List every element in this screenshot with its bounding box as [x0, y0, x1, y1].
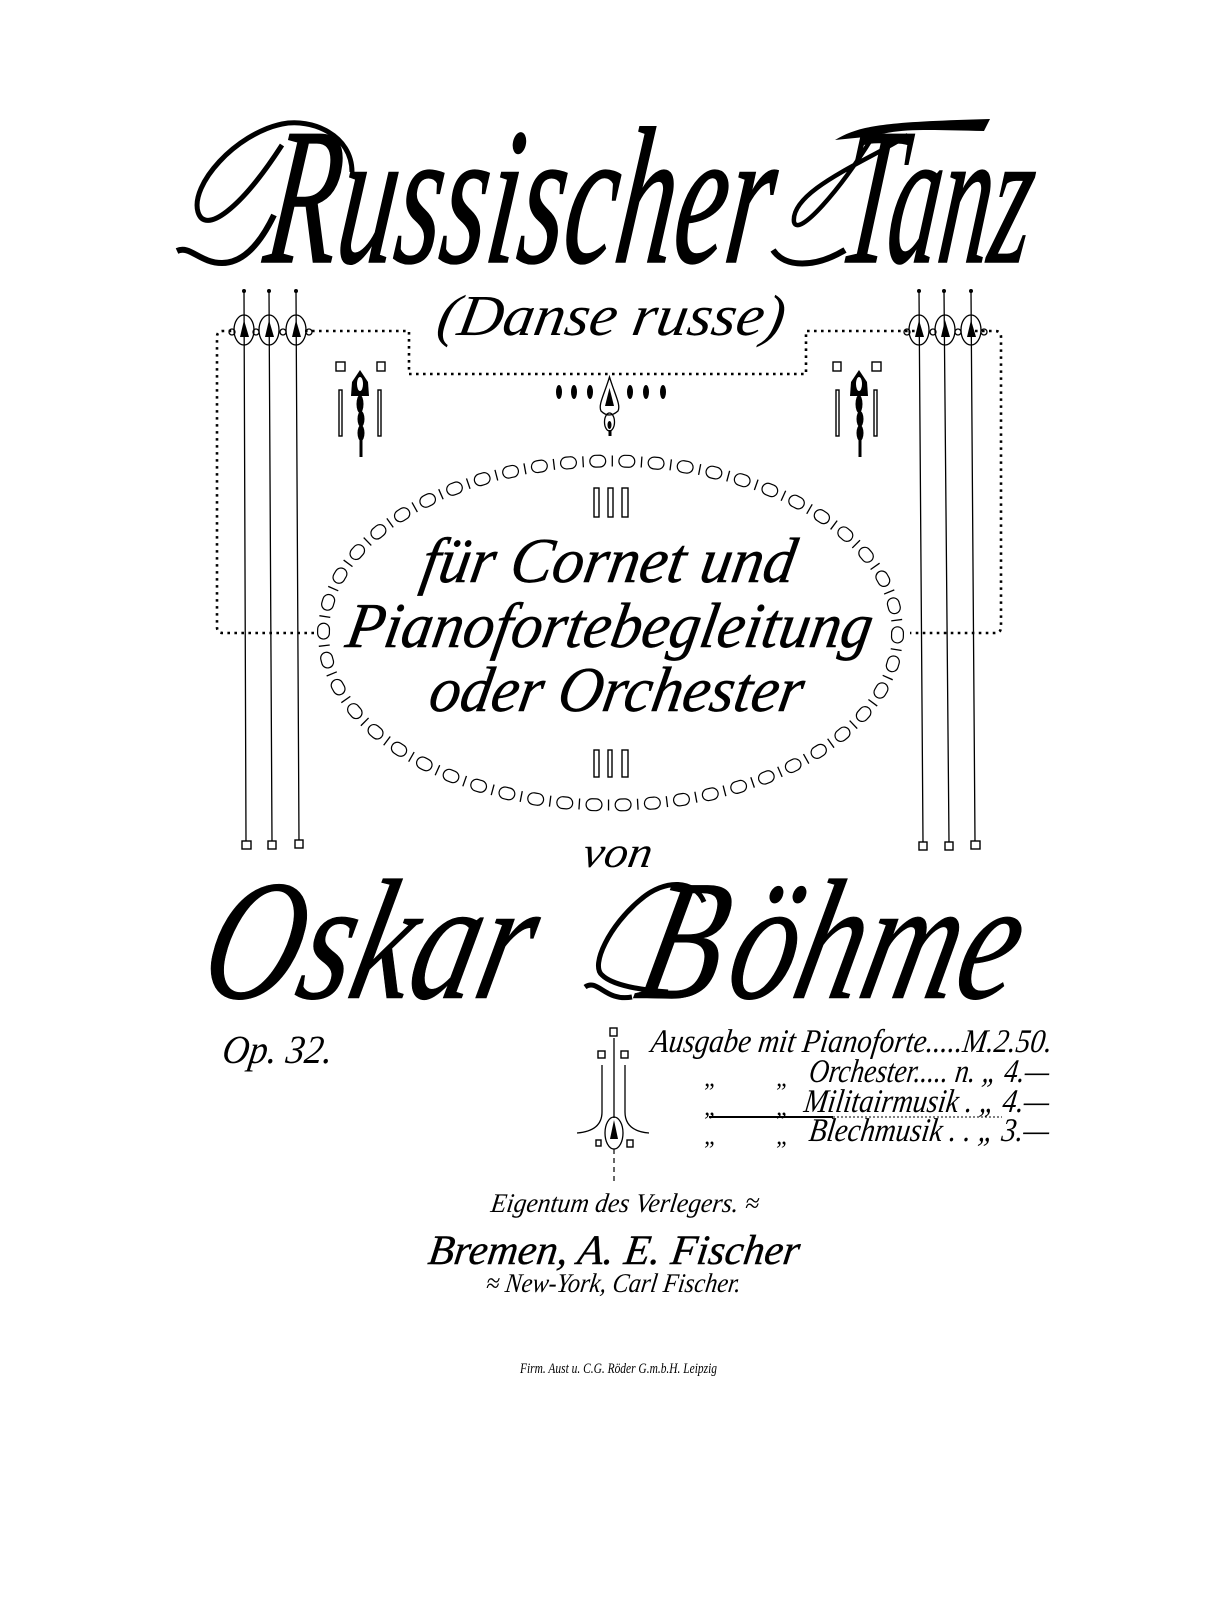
- price list: „: [704, 1066, 717, 1092]
- price list: Orchester..... n. „ 4.—: [807, 1053, 1052, 1090]
- small bell ornament: [577, 1028, 649, 1182]
- price list: Blechmusik . . „ 3.—: [807, 1112, 1053, 1149]
- left spear ornament: [336, 362, 385, 457]
- bottom bars: [594, 750, 628, 777]
- price list: [647, 1023, 1055, 1150]
- composer name: [187, 845, 1044, 1036]
- engraver imprint: Firm. Aust u. C.G. Röder G.m.b.H. Leipzig: [519, 1361, 717, 1377]
- subtitle: (Danse russe): [433, 283, 791, 348]
- price list: „: [704, 1095, 717, 1121]
- instrumentation text: [341, 525, 879, 725]
- right vertical lines with ovals: [904, 289, 987, 850]
- composer name: Oskar: [187, 845, 558, 1036]
- composer name: Böhme: [623, 845, 1044, 1035]
- instrumentation text: oder Orchester: [425, 654, 811, 725]
- left vertical lines with ovals: [229, 289, 312, 849]
- top bars: [594, 488, 628, 517]
- price list: Militairmusik . „ 4.—: [801, 1083, 1052, 1120]
- price list: „: [776, 1095, 789, 1121]
- center ornament: [556, 377, 666, 436]
- publisher note: Eigentum des Verlegers. ≈: [488, 1188, 761, 1218]
- price list: „: [776, 1124, 789, 1150]
- title: Tanz: [831, 90, 1047, 305]
- price list: Ausgabe mit Pianoforte.....M.2.50.: [647, 1023, 1055, 1060]
- title: Russischer: [256, 90, 789, 305]
- von: von: [579, 827, 657, 877]
- dotted frame: [217, 331, 1001, 633]
- publisher name: Bremen, A. E. Fischer: [426, 1227, 804, 1274]
- price list: „: [704, 1124, 717, 1150]
- price list: „: [776, 1066, 789, 1092]
- right spear ornament: [833, 362, 881, 457]
- new york publisher: ≈ New-York, Carl Fischer.: [484, 1268, 743, 1298]
- instrumentation text: Pianofortebegleitung: [341, 590, 879, 661]
- instrumentation text: für Cornet und: [417, 525, 803, 596]
- opus number: Op. 32.: [220, 1027, 336, 1072]
- bead ring: [324, 461, 898, 805]
